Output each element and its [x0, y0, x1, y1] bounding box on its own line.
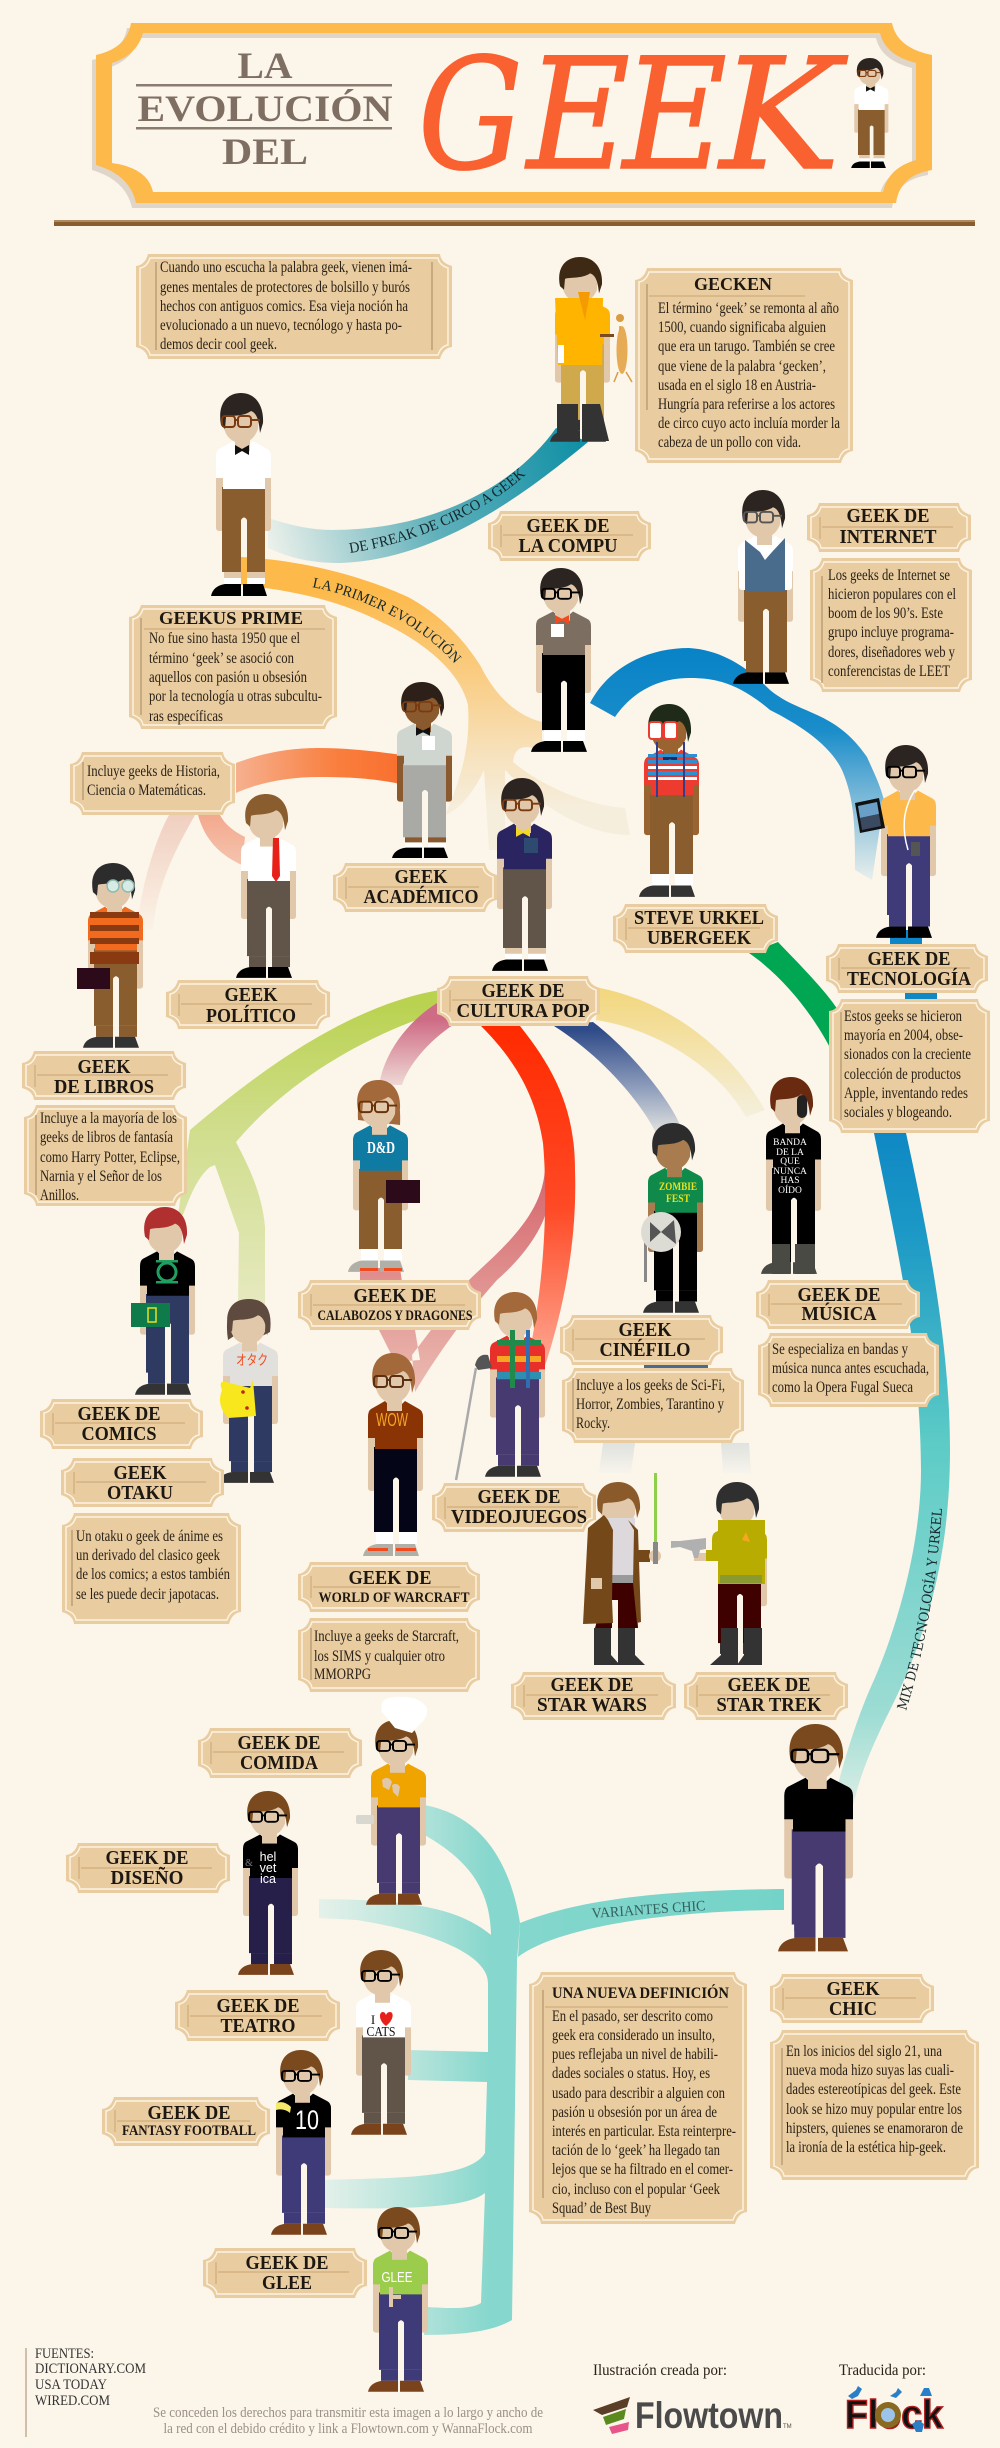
label: geek chic	[770, 1974, 934, 2023]
ribbon: blue stub under cinefilo	[644, 1360, 708, 1370]
label: geek de videojuegos: GEEK DE	[478, 1486, 560, 1508]
plaque: una nueva definicion: geek era considerado un insulto,	[552, 2027, 715, 2044]
plaque: libros text: geeks de libros de fantasía	[40, 1129, 173, 1146]
person: geek calabozos y dragones: D&D	[367, 1138, 395, 1157]
label: geek de comics	[40, 1399, 203, 1449]
ribbon: la primer evolucion	[241, 557, 630, 850]
plaque: geekus prime: No fue sino hasta 1950 que el	[149, 630, 300, 647]
person: geek de musica: BANDA	[773, 1138, 807, 1148]
person: geek otaku: オタク	[236, 1350, 268, 1370]
plaque: otaku text: Un otaku o geek de ánime es	[76, 1528, 223, 1545]
person: geek de world of warcraft	[363, 1353, 423, 1556]
person: geek cinefilo: FEST	[666, 1191, 690, 1205]
plaque: otaku text	[62, 1513, 241, 1624]
title banner: E	[524, 26, 630, 205]
label: geek de comida	[198, 1728, 362, 1778]
person: geek de videojuegos	[456, 1292, 545, 1480]
plaque: musica text: como la Opera Fugal Sueca	[772, 1379, 913, 1396]
label: geek de world of warcraft: WORLD OF WARCRAFT	[318, 1590, 470, 1606]
ribbon: cultura pop yellow green	[178, 990, 445, 1305]
label: geek de teatro: TEATRO	[220, 2015, 296, 2037]
person: geek de fantasy football: 10	[295, 2105, 319, 2135]
ribbon: academico orange	[236, 748, 405, 793]
person: geek academico	[392, 682, 452, 858]
label: geek de fantasy football: FANTASY FOOTBALL	[122, 2123, 256, 2139]
plaque: geekus prime: GEEKUS PRIME	[159, 608, 303, 628]
plaque: gecken: Hungría para referirse a los actores	[658, 396, 835, 413]
plaque: internet text: conferencistas de LEET	[828, 663, 950, 680]
label: geek de libros	[22, 1051, 186, 1100]
label: geek de internet: INTERNET	[840, 526, 937, 548]
person: geek otaku	[218, 1299, 278, 1483]
label: steve urkel ubergeek: UBERGEEK	[647, 927, 751, 949]
plaque: una nueva definicion: interés en particular. Esta reinterpre-	[552, 2123, 736, 2140]
label: geek de star trek: GEEK DE	[728, 1674, 810, 1696]
label: geek de la compu	[488, 511, 651, 561]
person: geek de diseno: hel	[260, 1850, 276, 1864]
person: geek de comics	[131, 1207, 195, 1395]
person: steve urkel	[639, 704, 699, 897]
ribbon: variantes chic: VARIANTES CHIC	[591, 1898, 706, 1922]
person: geekus prime	[211, 393, 271, 596]
label: geek de musica: GEEK DE	[798, 1284, 880, 1306]
sources: USA TODAY	[35, 2377, 107, 2393]
plaque: tecnologia text: Estos geeks se hicieron	[844, 1008, 962, 1025]
label: geek de star trek: STAR TREK	[716, 1694, 822, 1716]
person: geek de fantasy football	[271, 2050, 331, 2235]
rights note	[153, 2405, 543, 2437]
ribbon: mix de tecnologia y urkel	[838, 930, 950, 1805]
plaque: internet text: Los geeks de Internet se	[828, 567, 950, 584]
plaque: intro text	[136, 254, 452, 359]
ribbon: urkel green	[749, 942, 838, 1060]
plaque: wow text: los SIMS y cualquier otro	[314, 1648, 445, 1665]
person: geek de libros	[77, 863, 143, 1048]
label: steve urkel ubergeek	[613, 904, 778, 953]
header divider	[54, 220, 975, 226]
plaque: gecken: 1500, cuando significaba alguien	[658, 319, 826, 336]
plaque: una nueva definicion: lejos que se ha filtrado en el comer-	[552, 2161, 733, 2178]
plaque: geek chic text: hipsters, quienes se enamoraron de	[786, 2120, 963, 2137]
person: geek de diseno: ica	[260, 1872, 276, 1886]
plaque: internet text: boom de los 90’s. Este	[828, 605, 943, 622]
plaque: tecnologia text: colección de productos	[844, 1066, 961, 1083]
label: geek de comics: GEEK DE	[78, 1403, 160, 1425]
title banner	[92, 23, 932, 208]
plaque: cinefilo text: Rocky.	[576, 1415, 610, 1432]
ribbon: variantes chic	[518, 1889, 784, 1957]
ribbon: pink branch to wow	[360, 1165, 549, 1392]
person: geek de musica: NUNCA	[773, 1167, 807, 1177]
plaque: gecken: que viene de la palabra ‘gecken’,	[658, 358, 826, 375]
label: geek de glee: GLEE	[262, 2272, 312, 2294]
plaque: musica text	[758, 1333, 939, 1407]
plaque: gecken: cabeza de un pollo con vida.	[658, 434, 801, 451]
person: geek de teatro	[351, 1950, 411, 2135]
plaque: wow text: Incluye a geeks de Starcraft,	[314, 1628, 459, 1645]
credit: ilustracion creada por: Ilustración creada por:	[593, 2362, 727, 2379]
plaque: otaku text: un derivado del clasico geek	[76, 1547, 220, 1564]
plaque: geek chic text: la ironía de la estética hip-geek.	[786, 2139, 946, 2156]
title banner: K	[717, 26, 848, 205]
plaque: otaku text: se les puede decir japotacas.	[76, 1586, 219, 1603]
person: geek de glee	[368, 2207, 428, 2392]
label: geek de star trek	[684, 1672, 848, 1720]
label: geek cinefilo: CINÉFILO	[600, 1338, 690, 1361]
title banner: LA	[238, 46, 293, 87]
sources: FUENTES:	[35, 2346, 94, 2362]
label: geek de musica: MÚSICA	[802, 1301, 877, 1325]
plaque: intro text: genes mentales de protectores de bolsillo y burós	[160, 279, 410, 296]
plaque: historia: Ciencia o Matemáticas.	[87, 782, 206, 799]
plaque: gecken: usada en el siglo 18 en Austria-	[658, 377, 816, 394]
plaque: gecken: que era un tarugo. También se cree	[658, 338, 835, 355]
label: geek de diseno	[66, 1843, 230, 1893]
rights note: la red con el debido crédito y link a Flowtown.com y WannaFlock.com	[164, 2421, 533, 2437]
plaque: una nueva definicion: En el pasado, ser descrito como	[552, 2008, 713, 2025]
plaque: libros text	[24, 1105, 187, 1206]
label: geek de fantasy football	[102, 2097, 270, 2146]
label: geek de libros: GEEK	[78, 1056, 131, 1078]
logo: flowtown: Flowtown	[635, 2395, 783, 2436]
label: geek chic: GEEK	[826, 1978, 880, 2000]
plaque: una nueva definicion	[529, 1972, 747, 2224]
plaque: una nueva definicion: dades sociales o status. Hoy, es	[552, 2065, 710, 2082]
label: geek de glee	[203, 2248, 367, 2298]
plaque: tecnologia text	[829, 999, 990, 1133]
label: geek otaku: GEEK	[114, 1462, 167, 1484]
label: geek de teatro	[175, 1990, 340, 2041]
plaque: geek chic text: dades estereotípicas del geek. Este	[786, 2081, 961, 2098]
ribbon: de freak de circo a geek: DE FREAK DE CIRCO A GEEK	[348, 468, 526, 553]
plaque: una nueva definicion: UNA NUEVA DEFINICIÓN	[552, 1985, 729, 2002]
plaque: gecken: de circo cuyo acto incluía morder la	[658, 415, 840, 432]
label: geek de cultura pop	[437, 976, 600, 1026]
plaque: una nueva definicion: usado para describir a alguien con	[552, 2085, 725, 2102]
label: geek politico: POLÍTICO	[206, 1004, 296, 1027]
plaque: libros text: como Harry Potter, Eclipse,	[40, 1149, 180, 1166]
plaque: cinefilo text	[562, 1368, 744, 1443]
plaque: cinefilo text: Horror, Zombies, Tarantino y	[576, 1396, 724, 1413]
label: geek chic: CHIC	[829, 1998, 877, 2020]
plaque: intro text: hechos con antiguos comics. Esa vieja noción ha	[160, 298, 408, 315]
label: geek de fantasy football: GEEK DE	[148, 2102, 230, 2124]
label: geek de cultura pop: CULTURA POP	[456, 1000, 590, 1022]
plaque: una nueva definicion: Squad’ de Best Buy	[552, 2200, 651, 2217]
rights note: Se conceden los derechos para transmitir esta imagen a lo largo y ancho de	[153, 2405, 543, 2421]
person: geek de tecnologia	[855, 745, 936, 938]
plaque: geekus prime	[129, 605, 337, 729]
plaque: internet text: grupo incluye programa-	[828, 624, 954, 641]
logo: flock: Flock	[845, 2393, 944, 2437]
plaque: tecnologia text: mayoría en 2004, obse-	[844, 1027, 963, 1044]
plaque: historia	[70, 752, 235, 815]
label: geek academico: ACADÉMICO	[364, 885, 478, 908]
plaque: geekus prime: aquellos con pasión u obsesión	[149, 669, 307, 686]
title banner: G	[418, 26, 523, 205]
person: geek de teatro: CATS	[366, 2025, 396, 2040]
title banner: EVOLUCIÓN	[138, 88, 393, 130]
label: geek de musica	[756, 1280, 920, 1329]
ribbon: cultura pop yellow	[596, 988, 765, 1117]
label: geek de calabozos y dragones	[298, 1280, 481, 1330]
person: geek cinefilo	[641, 1123, 703, 1313]
person: geek de musica: DE LA	[776, 1148, 804, 1158]
label: geek cinefilo: GEEK	[618, 1319, 672, 1341]
person: geek de musica	[761, 1077, 821, 1274]
person: geek de diseno	[238, 1791, 298, 1975]
plaque: geek chic text: look se hizo muy popular entre los	[786, 2101, 962, 2118]
ribbon: cultura pop dark blue	[554, 1022, 680, 1135]
plaque: intro text: evolucionado a un nuevo, tecnólogo y hasta po-	[160, 317, 402, 334]
label: geek de internet	[807, 503, 971, 552]
person: geek de comida	[356, 1697, 427, 1905]
person: geek cinefilo: ZOMBIE	[659, 1179, 697, 1193]
plaque: libros text: Incluye a la mayoría de los	[40, 1110, 177, 1127]
ribbon: cultura pop red	[481, 1026, 575, 1392]
person: geek de musica: OÍDO	[778, 1184, 802, 1196]
person: geek de diseno: &	[245, 1858, 253, 1869]
credit: traducida por: Traducida por:	[839, 2362, 926, 2379]
plaque: internet text: dores, diseñadores web y	[828, 644, 955, 661]
plaque: musica text: música nunca antes escuchada,	[772, 1360, 929, 1377]
plaque: geek chic text: En los inicios del siglo 21, una	[786, 2043, 942, 2060]
label: geek de tecnologia: TECNOLOGÍA	[847, 967, 971, 990]
label: geek de tecnologia	[826, 944, 988, 993]
label: geek de teatro: GEEK DE	[216, 1995, 300, 2017]
label: geek de world of warcraft	[298, 1562, 480, 1612]
plaque: otaku text: de los comics; a estos también	[76, 1566, 230, 1583]
ribbon: cultura pop pink	[379, 1003, 453, 1085]
person: geek politico	[236, 794, 296, 978]
ribbon: chic branches	[319, 1805, 520, 2335]
plaque: gecken: GECKEN	[694, 274, 772, 294]
label: geek de calabozos y dragones: GEEK DE	[354, 1285, 436, 1307]
label: geek de glee: GEEK DE	[246, 2252, 328, 2274]
plaque: wow text	[298, 1618, 480, 1692]
label: geek de calabozos y dragones: CALABOZOS Y DRAGONES	[318, 1308, 472, 1324]
title banner: DEL	[222, 132, 308, 173]
label: geek de diseno: GEEK DE	[106, 1847, 188, 1869]
sources: DICTIONARY.COM	[35, 2361, 146, 2377]
label: geek de comida: GEEK DE	[238, 1732, 320, 1754]
plaque: internet text	[810, 558, 972, 692]
label: geek otaku	[61, 1458, 224, 1507]
ribbon: internet to tecnologia	[590, 648, 884, 880]
label: geek politico	[166, 980, 330, 1029]
label: geek de libros: DE LIBROS	[54, 1076, 154, 1098]
label: geek de world of warcraft: GEEK DE	[348, 1567, 432, 1589]
label: geek de star wars: STAR WARS	[537, 1694, 647, 1716]
label: geek de videojuegos	[432, 1483, 596, 1532]
plaque: libros text: Anillos.	[40, 1187, 79, 1204]
person: geek de internet	[733, 490, 793, 684]
ribbon: la primer evolucion: LA PRIMER EVOLUCIÓN	[312, 578, 462, 663]
label: geek de cultura pop: GEEK DE	[482, 980, 564, 1002]
label: geek de tecnologia: GEEK DE	[868, 948, 950, 970]
person: geek de la compu	[531, 568, 591, 752]
sources	[26, 2346, 146, 2437]
person: geek cultura pop	[492, 778, 552, 971]
label: geek academico: GEEK	[394, 866, 448, 888]
person: geek de teatro: I	[371, 2012, 375, 2027]
plaque: musica text: Se especializa en bandas y	[772, 1341, 908, 1358]
ribbon: salmon to politico	[198, 815, 245, 865]
person: geek chic	[778, 1724, 853, 1951]
plaque: una nueva definicion: tación de lo ‘geek’ ha llegado tan	[552, 2142, 720, 2159]
plaque: tecnologia text: sociales y blogeando.	[844, 1104, 952, 1121]
plaque: internet text: hicieron populares con el	[828, 586, 956, 603]
plaque: tecnologia text: Apple, inventando redes	[844, 1085, 968, 1102]
label: geek academico	[333, 863, 497, 912]
person: gecken	[550, 257, 632, 442]
person: geek de star trek	[671, 1482, 767, 1665]
plaque: geekus prime: término ‘geek’ se asoció con	[149, 650, 294, 667]
ribbon: de freak de circo a geek	[268, 428, 588, 563]
plaque: tecnologia text: sionados con la creciente	[844, 1046, 971, 1063]
plaque: historia: Incluye geeks de Historia,	[87, 763, 220, 780]
plaque: geek chic text: nueva moda hizo suyas las cuali-	[786, 2062, 954, 2079]
label: geek de internet: GEEK DE	[846, 505, 930, 527]
plaque: intro text: Cuando uno escucha la palabra geek, vienen imá-	[160, 259, 412, 276]
person: geek de star wars	[583, 1473, 661, 1665]
label: geek de la compu: GEEK DE	[526, 515, 610, 537]
plaque: cinefilo text: Incluye a los geeks de Sci-Fi,	[576, 1377, 725, 1394]
ribbon: pale to libros	[137, 815, 195, 930]
ribbon: stubs to star wars and star trek	[599, 1443, 751, 1473]
label: geek politico: GEEK	[224, 984, 278, 1006]
person: geek de world of warcraft: WOW	[376, 1410, 408, 1430]
plaque: wow text: MMORPG	[314, 1666, 371, 1683]
plaque: una nueva definicion: pues reflejaba un nivel de habili-	[552, 2046, 718, 2063]
ribbon: mix de tecnologia y urkel: MIX DE TECNOLOGÍA Y URKEL	[896, 1508, 942, 1710]
plaque: una nueva definicion: pasión u obsesión por un área de	[552, 2104, 717, 2121]
label: geek de star wars: GEEK DE	[550, 1674, 634, 1696]
plaque: geekus prime: por la tecnología u otras subcultu-	[149, 688, 322, 705]
label: steve urkel ubergeek: STEVE URKEL	[634, 907, 764, 929]
label: geek de comics: COMICS	[82, 1423, 156, 1445]
person: geek de diseno: vet	[260, 1861, 277, 1875]
plaque: geekus prime: ras específicas	[149, 708, 223, 725]
plaque: geek chic text	[770, 2030, 979, 2180]
label: geek de star wars	[511, 1672, 676, 1720]
person: geek calabozos y dragones	[348, 1080, 420, 1272]
plaque: una nueva definicion: cio, incluso con el popular ‘Geek	[552, 2181, 720, 2198]
label: geek otaku: OTAKU	[107, 1482, 173, 1504]
label: geek cinefilo	[560, 1315, 723, 1365]
person: geek de glee: GLEE	[382, 2269, 412, 2286]
plaque: libros text: Narnia y el Señor de los	[40, 1168, 162, 1185]
sources: WIRED.COM	[35, 2393, 110, 2409]
person: geek de musica: HAS	[780, 1176, 800, 1186]
label: geek de videojuegos: VIDEOJUEGOS	[451, 1506, 587, 1528]
plaque: gecken: El término ‘geek’ se remonta al año	[658, 300, 839, 317]
plaque: intro text: demos decir cool geek.	[160, 336, 277, 353]
title banner: E	[620, 26, 727, 205]
plaque: gecken	[635, 268, 853, 463]
person: geek de musica: QUE	[780, 1157, 800, 1167]
label: geek de la compu: LA COMPU	[518, 535, 618, 557]
label: geek de comida: COMIDA	[240, 1752, 319, 1774]
logo: flowtown: TM	[783, 2424, 792, 2430]
label: geek de diseno: DISEÑO	[110, 1866, 184, 1889]
